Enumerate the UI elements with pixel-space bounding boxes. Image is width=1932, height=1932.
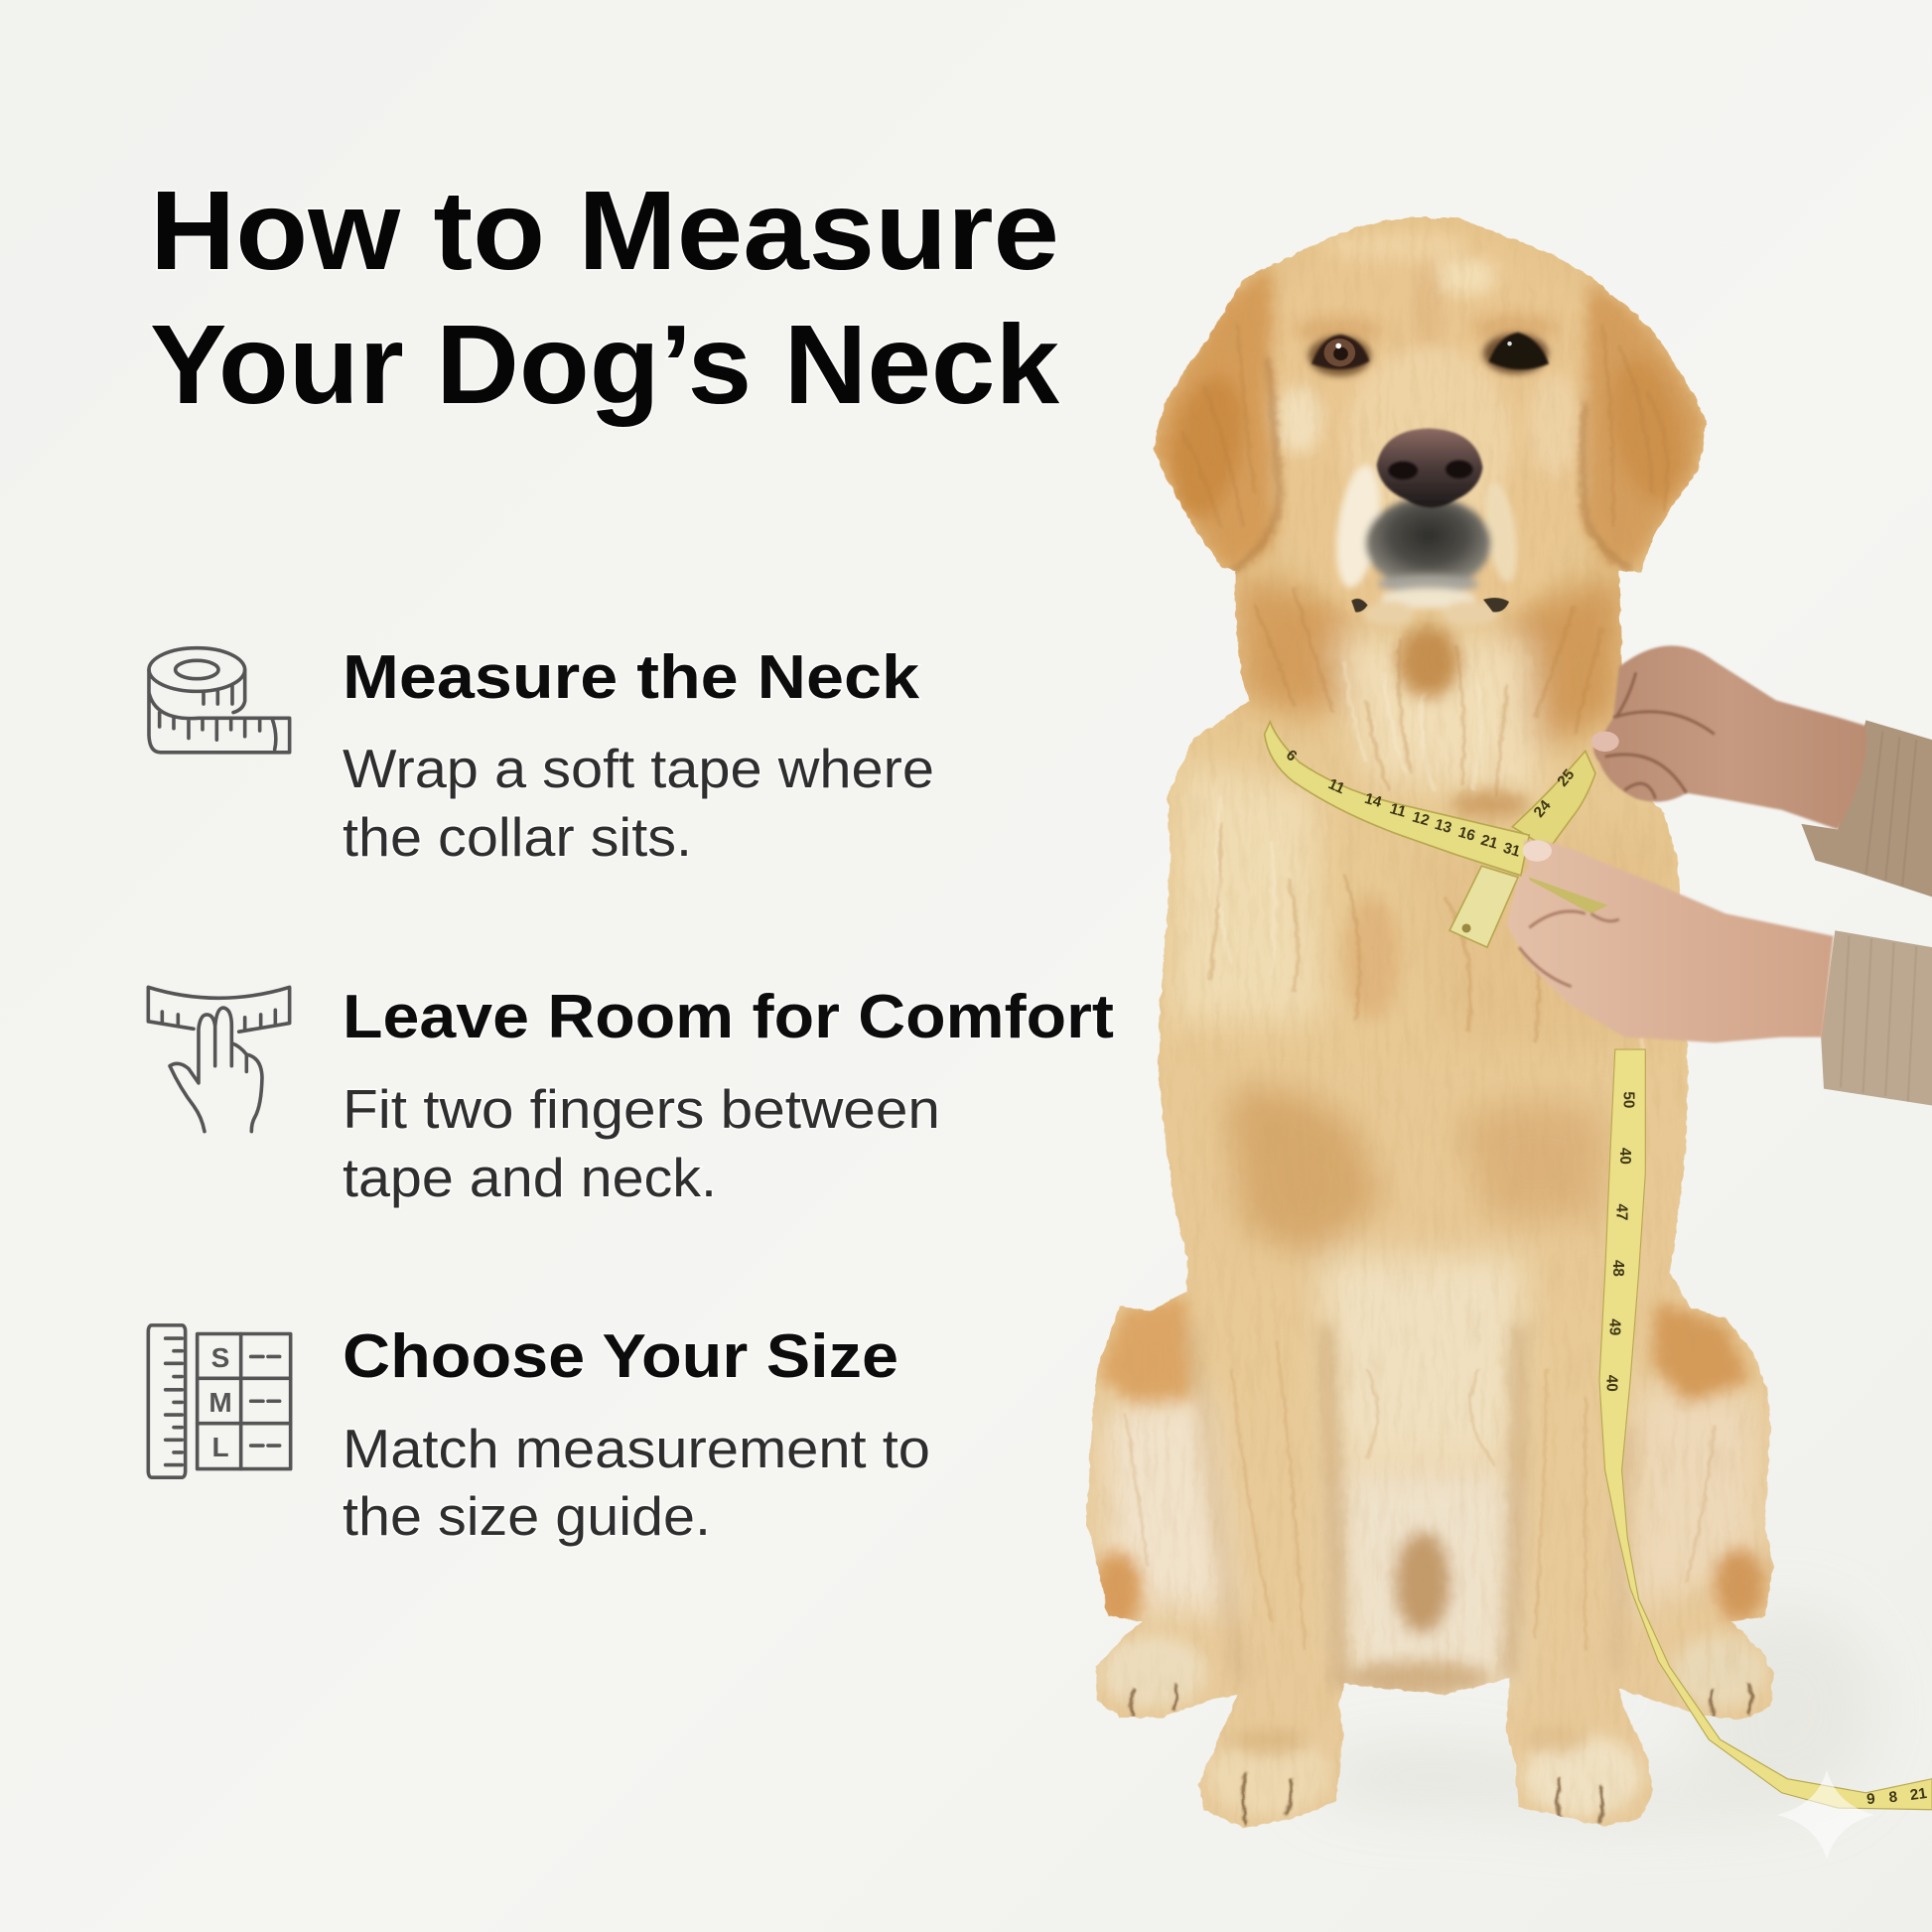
icon: ruler and size table — [148, 1325, 291, 1477]
tape numbers: 11 — [1325, 775, 1347, 798]
tape numbers: 12 — [1411, 809, 1432, 830]
fur shading: head and neck — [1171, 572, 1681, 1048]
heading: choose your size: Choose Your Size — [343, 1322, 898, 1391]
icon: ruler and size table: L — [211, 1432, 229, 1462]
icon: ruler and size table: S — [211, 1342, 229, 1373]
icon: ruler and size table: M — [208, 1387, 232, 1418]
text: choose your size description: the size guide. — [343, 1485, 711, 1547]
tape numbers: 24 — [1531, 796, 1555, 821]
title: How to Measure — [150, 168, 1059, 293]
tape numbers: 31 — [1501, 840, 1523, 861]
step 1: measure the neck — [149, 643, 934, 868]
tape numbers: 16 — [1456, 824, 1477, 845]
leg shadows — [1192, 1324, 1630, 1689]
text: measure the neck description: the collar sits. — [343, 806, 692, 868]
title: Your Dog’s Neck — [150, 302, 1059, 427]
text: measure the neck description — [343, 738, 934, 868]
tape numbers: 11 — [1388, 800, 1409, 821]
tape scale numbers: 40 — [1616, 1148, 1633, 1165]
tape scale numbers: 8 — [1888, 1789, 1898, 1806]
eyes — [1309, 333, 1549, 376]
tape scale numbers: 50 — [1619, 1091, 1636, 1108]
heading: measure the neck: Measure the Neck — [343, 643, 920, 712]
illustration: dog with hands and tape — [1052, 179, 1932, 1862]
tape numbers: 14 — [1363, 790, 1384, 811]
step 2: leave room for comfort — [148, 983, 1114, 1208]
fur strokes: dark — [1181, 325, 1667, 1042]
muzzle and mouth — [1329, 463, 1523, 625]
tape numbers: 13 — [1433, 816, 1453, 837]
title — [150, 168, 1059, 427]
tape scale numbers: 9 — [1866, 1791, 1875, 1808]
fur strokes: light — [1217, 661, 1643, 1054]
step 3: choose your size — [148, 1322, 930, 1547]
text: leave room description: tape and neck. — [343, 1147, 717, 1208]
floor shadow — [1311, 1608, 1876, 1819]
paw toe lines — [1131, 1684, 1751, 1825]
tape scale numbers — [1602, 1091, 1928, 1808]
sleeve: lower arm — [1821, 930, 1932, 1106]
hanging tape — [1599, 1049, 1932, 1810]
text: leave room description: Fit two fingers between — [343, 1078, 940, 1140]
text: choose your size description: Match measurement to — [343, 1418, 930, 1479]
fur grain — [1100, 268, 1756, 1811]
tape numbers — [1283, 747, 1579, 861]
tape numbers: 25 — [1554, 765, 1579, 790]
tape scale numbers: 49 — [1606, 1318, 1623, 1335]
tape numbers: 6 — [1283, 747, 1300, 765]
fur strokes: legs — [1125, 1341, 1715, 1650]
ear edges — [1232, 358, 1630, 572]
golden retriever — [1086, 216, 1775, 1829]
icon: tape roll — [149, 648, 290, 753]
hand: lower — [1507, 840, 1834, 1042]
text: measure the neck description: Wrap a soft tape where — [343, 738, 934, 799]
fur shading: lower body — [1092, 1088, 1768, 1825]
nose — [1377, 428, 1482, 507]
text: leave room description — [343, 1078, 940, 1208]
tape around neck — [1265, 722, 1595, 947]
sleeve: upper arm — [1801, 720, 1932, 897]
tape numbers: 21 — [1479, 832, 1500, 853]
tape scale numbers: 48 — [1609, 1260, 1626, 1277]
text: choose your size description — [343, 1418, 930, 1547]
watermark sparkle — [1777, 1770, 1874, 1860]
icon: fingers under tape — [148, 987, 290, 1132]
hand: upper — [1590, 645, 1866, 830]
tape scale numbers: 21 — [1909, 1785, 1928, 1804]
heading: leave room for comfort: Leave Room for Comfort — [343, 983, 1114, 1051]
tape scale numbers: 47 — [1612, 1203, 1629, 1220]
tape scale numbers: 40 — [1602, 1375, 1619, 1392]
